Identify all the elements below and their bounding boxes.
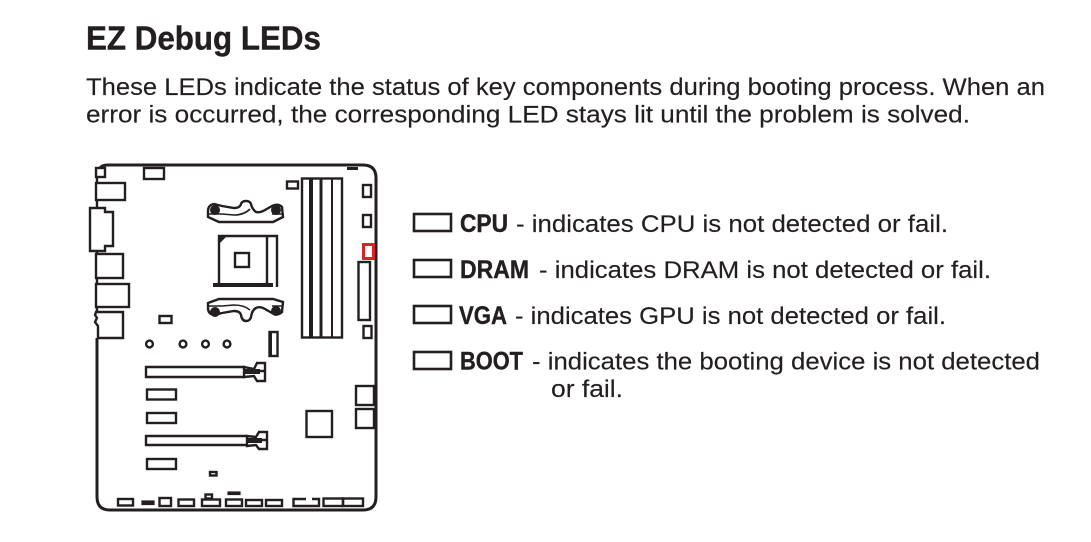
- bottom headers: [118, 492, 363, 506]
- legend: BOOT: [414, 348, 1040, 403]
- legend: BOOT: - indicates the booting device is not detected: [532, 348, 1040, 376]
- legend: CPU: - indicates CPU is not detected or fail.: [516, 211, 948, 238]
- legend: CPU: CPU: [460, 210, 508, 238]
- title: EZ Debug LEDs: [86, 20, 321, 58]
- intro text: These LEDs indicate the status of key components during booting process. When an: [86, 74, 1045, 101]
- rear IO connectors: [90, 168, 129, 338]
- CPU socket: [213, 236, 277, 287]
- EZ Debug LED highlight: [364, 244, 374, 258]
- legend: DRAM: - indicates DRAM is not detected or fail.: [539, 257, 991, 284]
- top CPU bracket: [208, 201, 283, 222]
- memory slots: [302, 178, 342, 338]
- motherboard diagram: [90, 165, 376, 510]
- board outline: [97, 165, 376, 510]
- legend: BOOT: or fail.: [551, 376, 623, 403]
- mounting holes: [146, 341, 230, 347]
- PCIe slot 1: [146, 363, 265, 381]
- legend: VGA: - indicates GPU is not detected or fail.: [515, 303, 946, 330]
- intro text: error is occurred, the corresponding LED stays lit until the problem is solved.: [86, 102, 970, 129]
- small PCIe slots: [147, 390, 176, 469]
- intro text: [86, 74, 1045, 129]
- PCIe slot 2: [146, 432, 267, 449]
- top headers: [144, 168, 298, 323]
- bottom CPU bracket: [208, 299, 283, 321]
- legend: DRAM: DRAM: [460, 256, 529, 284]
- chipset: [306, 411, 332, 437]
- legend: VGA: VGA: [459, 302, 507, 330]
- legend: BOOT: BOOT: [460, 348, 523, 376]
- small component: [210, 472, 216, 476]
- right side connectors: [347, 167, 374, 428]
- M.2 slot: [269, 332, 278, 356]
